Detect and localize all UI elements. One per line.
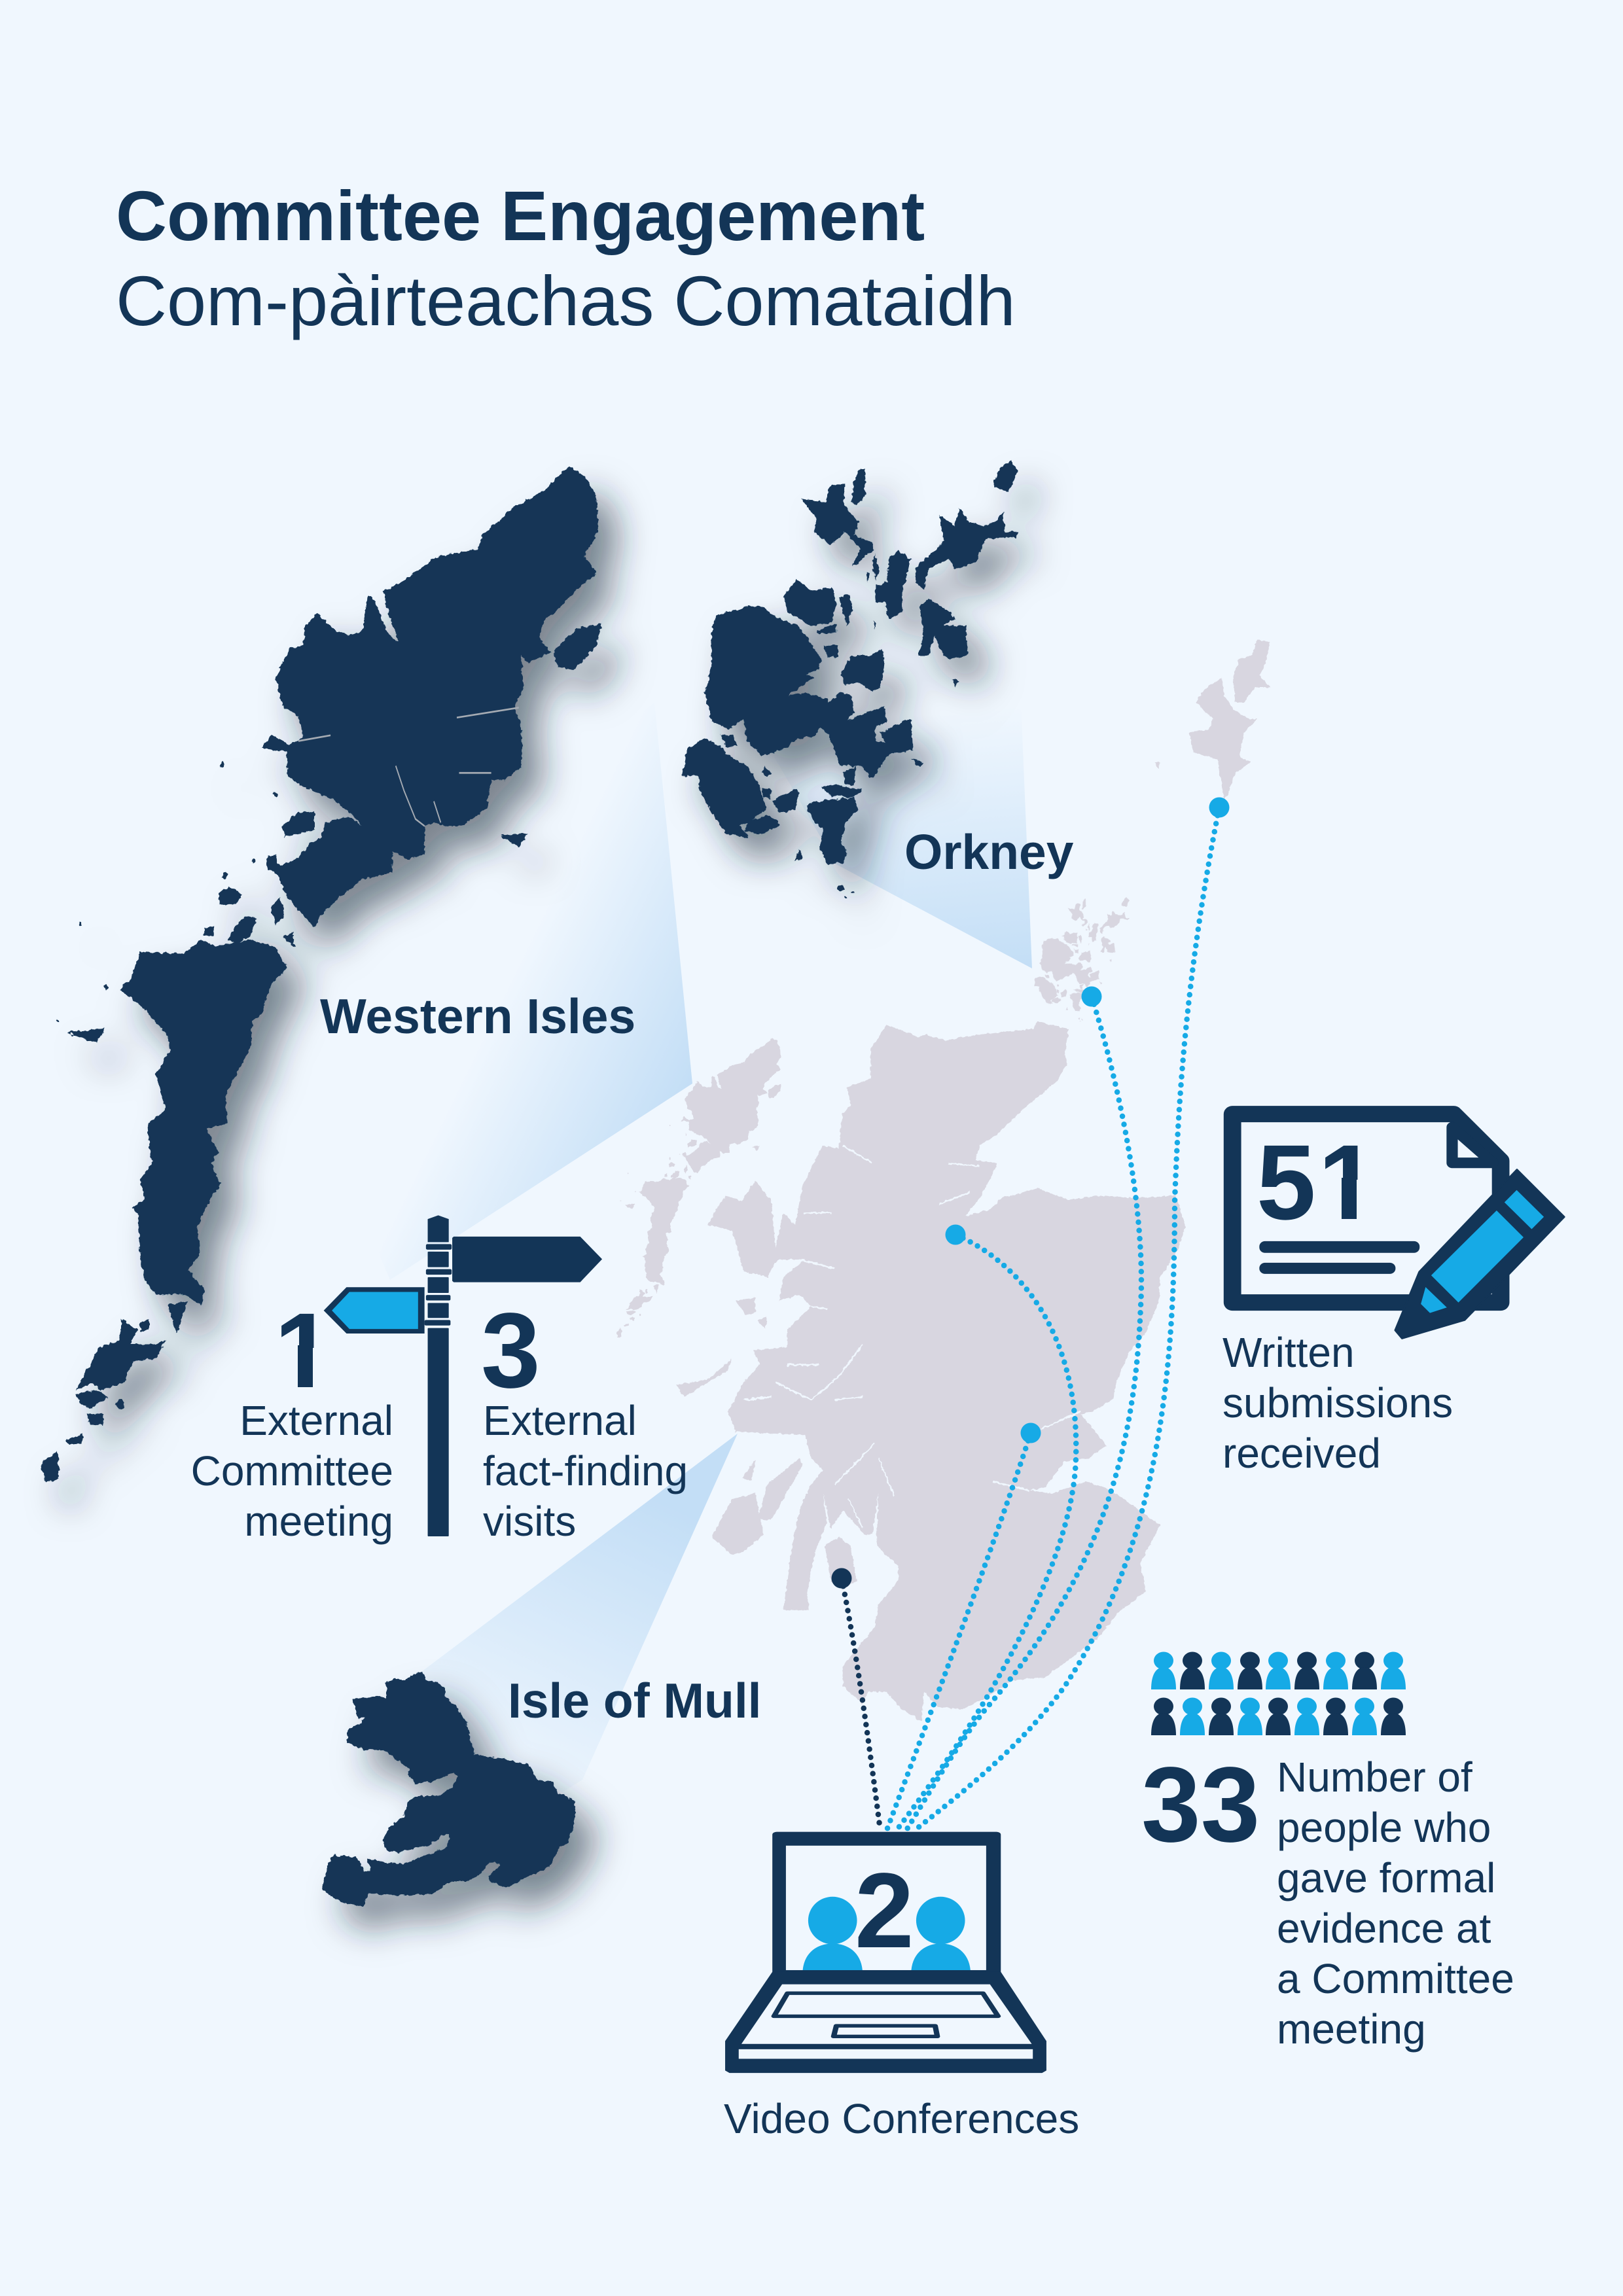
stat: written submissions: 1 [1318, 1122, 1378, 1242]
location markers [831, 797, 1229, 1589]
island labels [320, 824, 1074, 1728]
stat: people giving evidence: gave formal [1277, 1854, 1495, 1901]
stat: people giving evidence: a Committee [1277, 1955, 1514, 2002]
stat: external fact-finding visits [481, 1290, 688, 1545]
island labels: Western Isles [320, 989, 635, 1044]
loch lines in Western Isles [298, 708, 519, 826]
stat: written submissions [1222, 1122, 1453, 1477]
Orkney small [1034, 897, 1129, 1021]
stat: people giving evidence: meeting [1277, 2005, 1426, 2053]
stat: external committee meeting [191, 1290, 393, 1545]
stat: written submissions: Written [1222, 1329, 1355, 1376]
dotted connector lines [842, 807, 1219, 1830]
stat: external fact-finding visits: visits [483, 1498, 576, 1545]
map: Scotland in grey [616, 639, 1270, 1721]
light beam: Orkney [753, 702, 1032, 968]
title [116, 176, 1016, 340]
icon: signpost [324, 1215, 602, 1536]
stat: video conferences: Video Conferences [724, 2095, 1079, 2142]
icon: document with pencil [1232, 1114, 1564, 1339]
stat: written submissions: 5 [1257, 1122, 1316, 1242]
stat: written submissions: submissions [1222, 1379, 1453, 1426]
light beam: Western Isles [262, 703, 692, 1280]
island labels: Isle of Mull [508, 1673, 762, 1728]
mainland [676, 1021, 1186, 1721]
map: Western Isles [41, 467, 601, 1482]
Shetland [1154, 639, 1270, 799]
stat: people giving evidence: 33 [1141, 1744, 1260, 1864]
stat: external committee meeting: meeting [244, 1498, 393, 1545]
island labels: Orkney [904, 824, 1074, 879]
stat: external committee meeting: External [240, 1397, 393, 1444]
stat: external fact-finding visits: External [483, 1397, 637, 1444]
stat: people giving evidence [1141, 1744, 1514, 2053]
title: Com-pàirteachas Comataidh [116, 261, 1016, 340]
map: Isle of Mull [322, 1672, 576, 1906]
stat: people giving evidence: evidence at [1277, 1905, 1491, 1952]
map: Orkney [682, 461, 1018, 899]
stat: people giving evidence: Number of [1277, 1754, 1472, 1801]
title: Committee Engagement [116, 176, 925, 255]
stat: external fact-finding visits: fact-finding [483, 1447, 688, 1494]
stat: external committee meeting: Committee [191, 1447, 393, 1494]
Western Isles small [616, 1038, 781, 1337]
stat: external fact-finding visits: 3 [481, 1290, 541, 1410]
stat: video conferences [724, 1850, 1079, 2142]
stat: video conferences: 2 [855, 1850, 914, 1970]
stat: written submissions: received [1222, 1430, 1381, 1477]
icon: row of people [1151, 1651, 1406, 1735]
icon: laptop [725, 1832, 1046, 2073]
stat: external committee meeting: 1 [274, 1290, 334, 1410]
light beam: Isle of Mull [419, 1434, 738, 1832]
stat: people giving evidence: people who [1277, 1804, 1491, 1851]
